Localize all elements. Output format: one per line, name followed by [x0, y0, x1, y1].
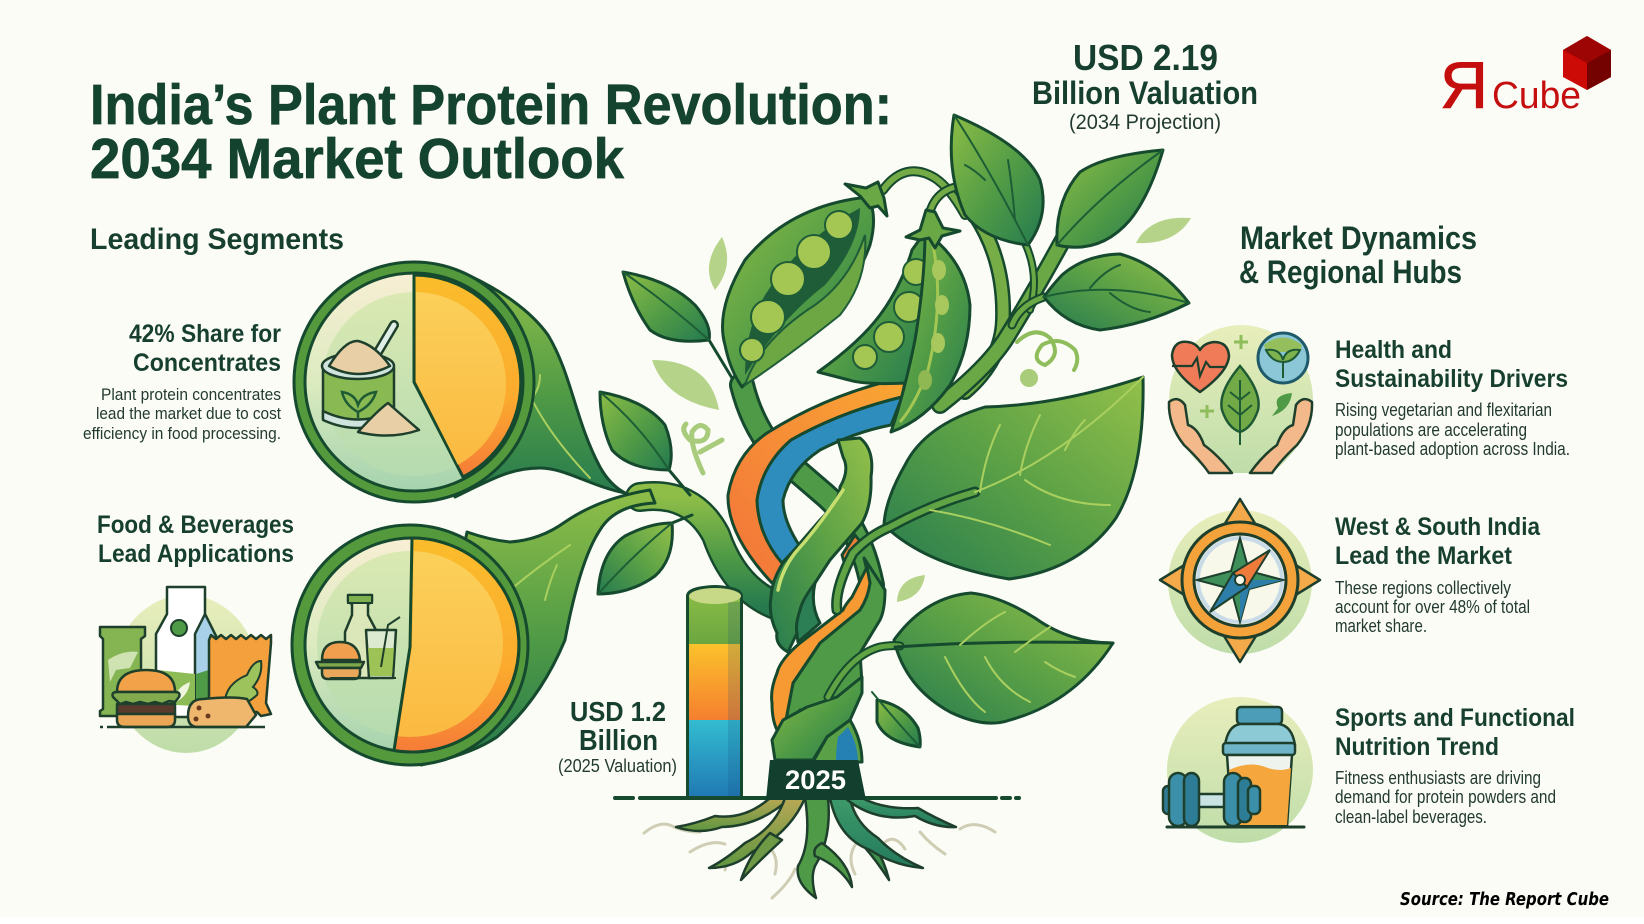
text block: sports and functional nutrition: Fitness enthusiasts are driving	[1335, 768, 1541, 788]
leaf: top right	[1057, 150, 1163, 247]
leaf: middle left	[600, 392, 671, 470]
icon: burger and drinks	[316, 595, 400, 679]
text block: west and south india: market share.	[1335, 616, 1427, 636]
text block: concentrates share: 42% Share for	[129, 320, 281, 348]
logo: Report Cube: Cube	[1492, 75, 1581, 117]
text block: health and sustainability	[1335, 336, 1570, 459]
icon: health and sustainability	[1169, 325, 1313, 473]
heading: market dynamics	[1239, 220, 1477, 290]
growth ribbon: orange and blue	[728, 377, 906, 583]
text block: concentrates share: lead the market due to cost	[96, 404, 281, 423]
leaf: small falling	[872, 692, 920, 747]
text block: health and sustainability: Rising vegetarian and flexitarian	[1335, 400, 1552, 420]
text block: west and south india	[1335, 513, 1541, 636]
twisted vine strands	[770, 438, 885, 762]
heading: leading segments: Leading Segments	[90, 223, 344, 256]
projection value: 2034: Billion Valuation	[1032, 75, 1258, 111]
title: 2034 Market Outlook	[90, 127, 624, 191]
text block: 2025 valuation: (2025 Valuation)	[558, 756, 677, 776]
year label: 2025	[766, 760, 866, 800]
text block: sports and functional nutrition: Nutrition Trend	[1335, 733, 1499, 761]
heading: market dynamics: & Regional Hubs	[1239, 254, 1462, 290]
text block: sports and functional nutrition: clean-label beverages.	[1335, 807, 1487, 827]
text block: west and south india: Lead the Market	[1335, 542, 1513, 570]
text block: health and sustainability: Sustainability Drivers	[1335, 365, 1568, 393]
leaf: large right	[837, 377, 1143, 610]
pie chart: concentrates share	[294, 262, 625, 502]
text block: west and south india: account for over 48% of total	[1335, 597, 1530, 617]
text block: concentrates share: Plant protein concentrates	[101, 385, 281, 404]
text block: west and south india: West & South India	[1335, 513, 1541, 541]
text block: sports and functional nutrition: Sports and Functional	[1335, 704, 1575, 732]
pale decorative leaves and tendrils	[652, 218, 1191, 602]
text block: health and sustainability: Health and	[1335, 336, 1452, 364]
icon: compass	[1160, 499, 1320, 662]
leaf: right	[1044, 254, 1189, 330]
text block: west and south india: These regions collectively	[1335, 578, 1511, 598]
text block: 2025 valuation: USD 1.2	[570, 696, 666, 727]
pie chart: food and beverages applications	[292, 490, 655, 765]
roots	[644, 798, 995, 898]
pea pod: open with peas	[722, 182, 887, 387]
vine stems	[640, 171, 1063, 606]
text block: sports and functional nutrition: demand for protein powders and	[1335, 787, 1556, 807]
text block: concentrates share	[83, 320, 281, 443]
logo: Report Cube	[1440, 36, 1611, 122]
leaf: upper left	[623, 272, 709, 341]
title	[90, 73, 892, 191]
pea pod: closed	[891, 210, 970, 432]
title: India’s Plant Protein Revolution:	[90, 73, 892, 137]
ground line	[615, 796, 1019, 800]
text block: concentrates share: Concentrates	[133, 349, 281, 377]
logo: Report Cube: Я	[1440, 48, 1488, 122]
projection value: 2034	[1032, 37, 1258, 134]
text block: 2025 valuation	[558, 696, 677, 776]
text block: sports and functional nutrition	[1335, 704, 1575, 827]
year label: 2025: 2025	[785, 765, 846, 795]
icon: food and drink products	[100, 587, 271, 753]
leaf: lower right	[828, 593, 1113, 723]
leaf: top centre	[951, 115, 1043, 245]
heading: market dynamics: Market Dynamics	[1240, 220, 1477, 256]
chart: 2025 market size bar	[686, 585, 743, 797]
projection value: 2034: (2034 Projection)	[1069, 111, 1221, 134]
text block: food and beverages: Food & Beverages	[97, 511, 294, 539]
icon: shaker and dumbbell	[1163, 697, 1313, 843]
text block: health and sustainability: populations are accelerating	[1335, 420, 1527, 440]
pea pod: half open	[818, 232, 929, 384]
leaf: lower left	[598, 523, 672, 594]
text block: concentrates share: efficiency in food processing.	[83, 424, 281, 443]
text block: food and beverages	[97, 511, 294, 568]
text block: health and sustainability: plant-based adoption across India.	[1335, 439, 1570, 459]
text block: 2025 valuation: Billion	[579, 725, 658, 757]
text block: food and beverages: Lead Applications	[98, 540, 294, 568]
projection value: 2034: USD 2.19	[1073, 37, 1218, 78]
icon: protein powder tub	[322, 325, 419, 436]
